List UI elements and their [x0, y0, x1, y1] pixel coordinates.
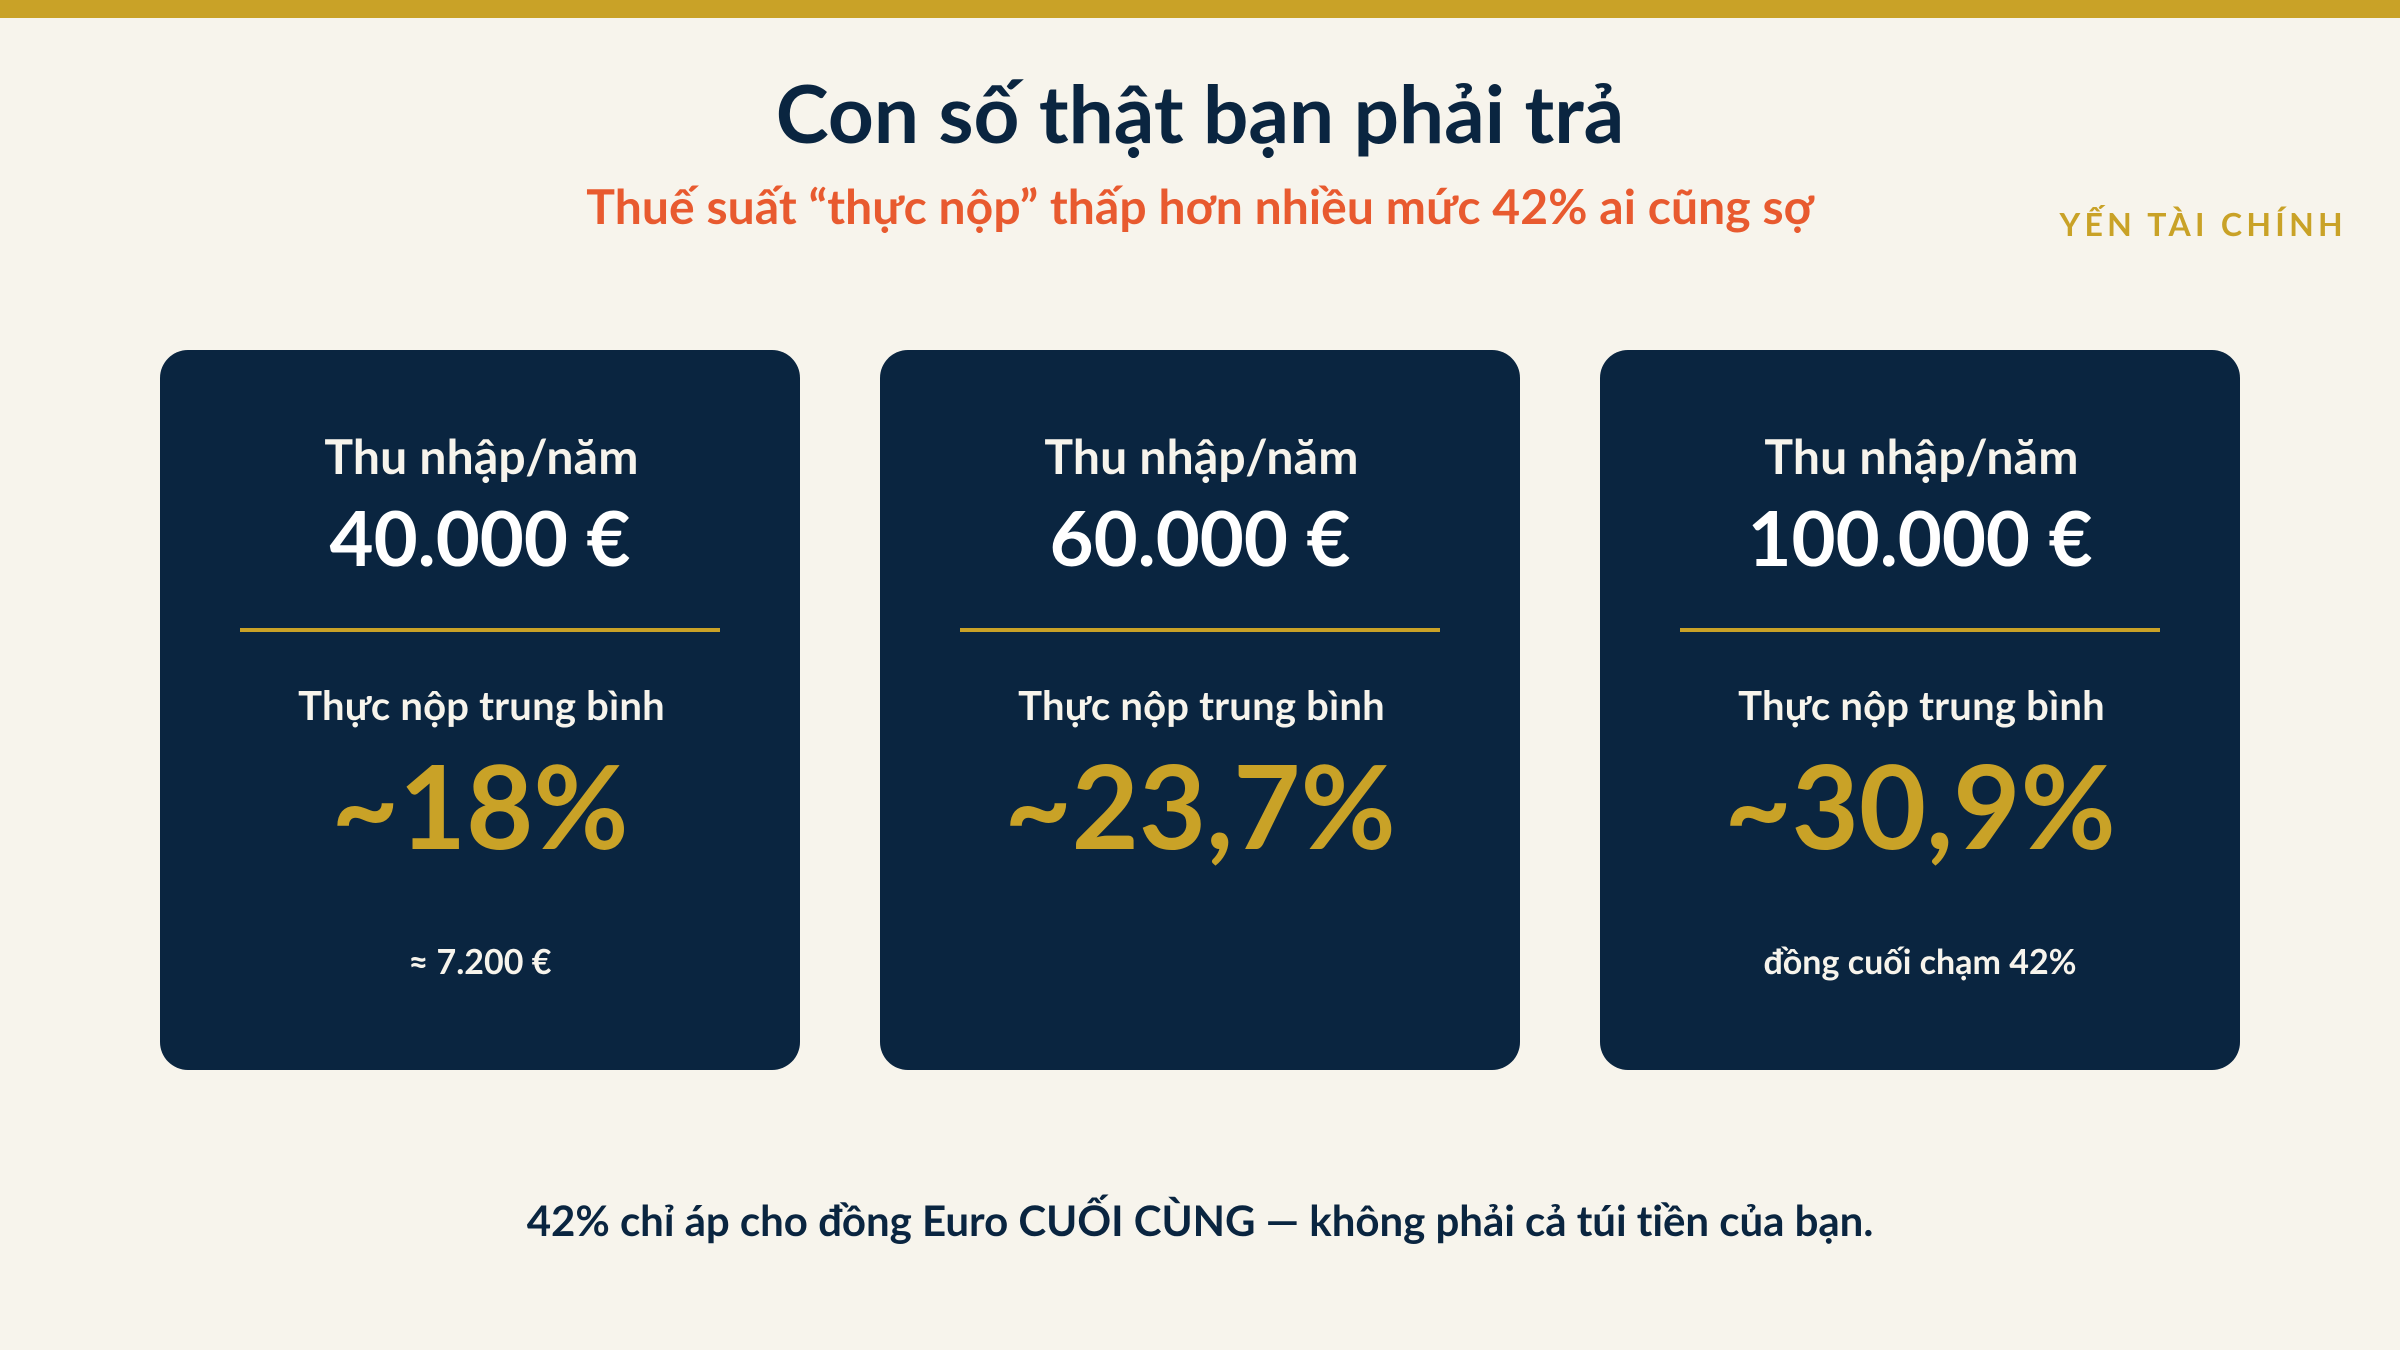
divider	[1680, 628, 2160, 632]
top accent bar	[0, 0, 2400, 18]
income value: 60.000 €	[1050, 492, 1350, 583]
divider	[960, 628, 1440, 632]
panel: income 60.000	[880, 350, 1520, 1070]
paid label: Thực nộp trung bình	[1018, 681, 1385, 729]
brand label: YẾN TÀI CHÍNH	[2059, 204, 2347, 243]
note: đồng cuối chạm 42%	[1763, 941, 2077, 982]
effective rate: ~18%	[332, 735, 628, 874]
effective rate: ~23,7%	[1004, 735, 1396, 874]
footer message: 42% chỉ áp cho đồng Euro CUỐI CÙNG — không phải cả túi tiền của bạn.	[527, 1195, 1873, 1245]
income label: Thu nhập/năm	[1764, 428, 2079, 485]
income label: Thu nhập/năm	[1044, 428, 1359, 485]
paid label: Thực nộp trung bình	[1738, 681, 2105, 729]
effective rate: ~30,9%	[1724, 735, 2116, 874]
note: ≈ 7.200 €	[409, 941, 551, 982]
subtitle: Thuế suất “thực nộp” thấp hơn nhiều mức 42% ai cũng sợ	[586, 178, 1814, 235]
income label: Thu nhập/năm	[324, 428, 639, 485]
income value: 100.000 €	[1747, 492, 2093, 583]
panel: income 100.000	[1600, 350, 2240, 1070]
title: Con số thật bạn phải trả	[776, 65, 1624, 161]
panel: income 40.000	[160, 350, 800, 1070]
divider	[240, 628, 720, 632]
income value: 40.000 €	[330, 492, 630, 583]
paid label: Thực nộp trung bình	[298, 681, 665, 729]
